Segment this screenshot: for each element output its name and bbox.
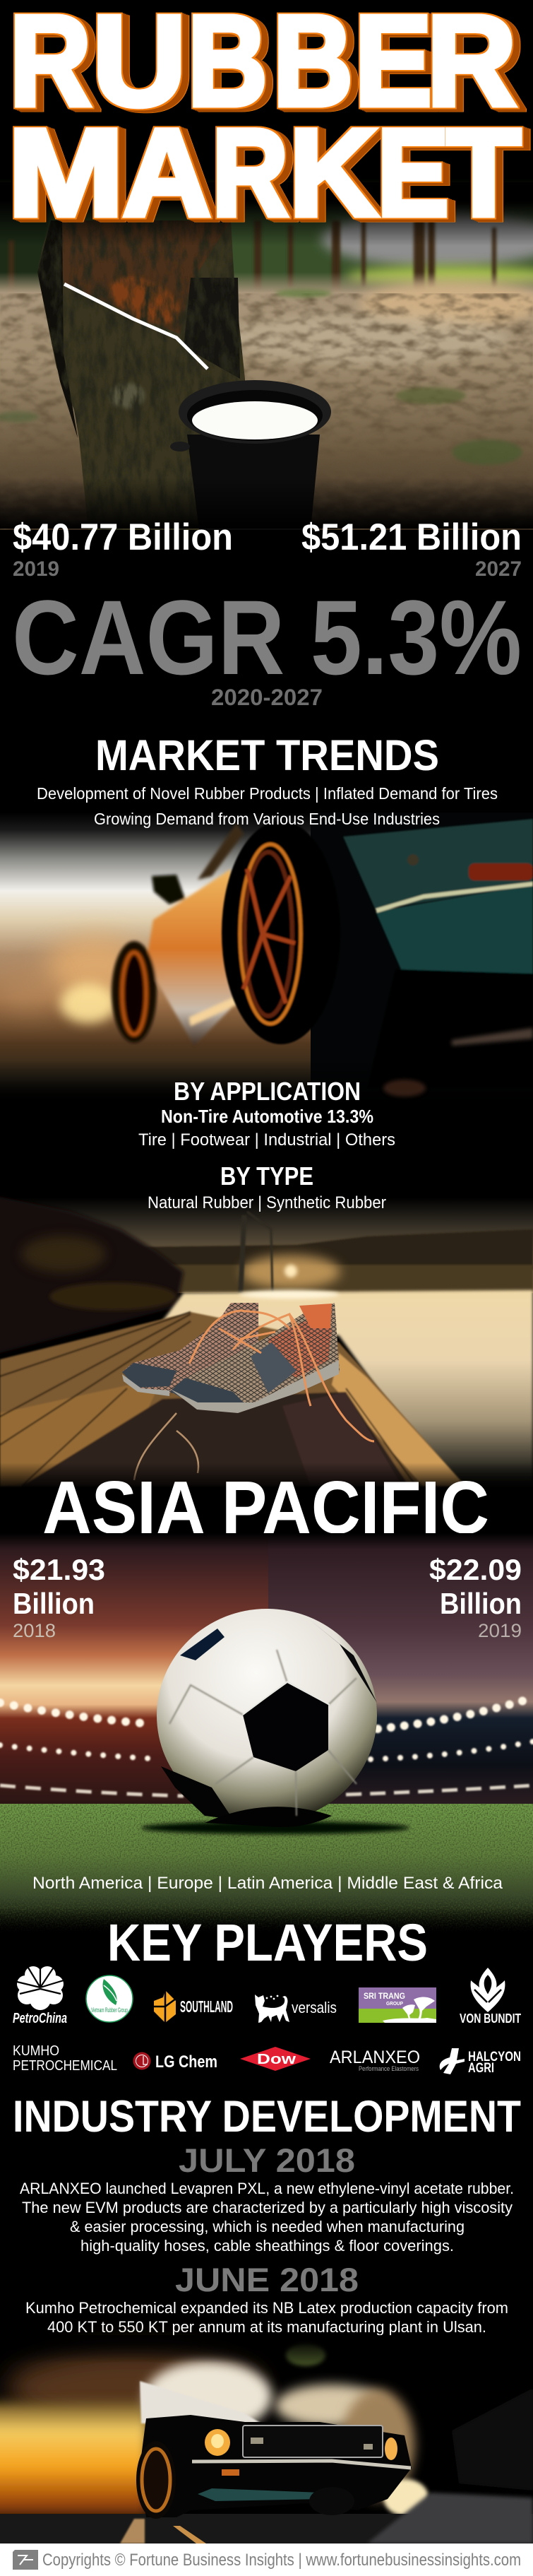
heading: by type: BY TYPE — [220, 1162, 313, 1190]
title: T — [446, 104, 521, 242]
logo: versalis: versalis — [292, 1999, 337, 2016]
year 2027: 2027 — [475, 557, 522, 581]
logo: LG Chem: LG Chem — [155, 2052, 217, 2072]
logo: Dow: Dow — [257, 2052, 297, 2067]
key player logos — [13, 1966, 521, 2076]
footer logo — [13, 2550, 38, 2570]
logo: Halcyon Agri: HALCYON — [468, 2050, 521, 2064]
logo: Halcyon Agri: AGRI — [468, 2061, 494, 2076]
footer — [0, 2543, 533, 2576]
trends line 1: Development of Novel Rubber Products | Inflated Demand for Tires — [37, 784, 498, 803]
logo: Kumho Petrochemical: KUMHO — [13, 2043, 59, 2059]
June 2018 text — [25, 2299, 508, 2336]
market trends — [37, 731, 498, 828]
heading: Asia Pacific: ASIA PACIFIC — [42, 1466, 489, 1549]
date: July 2018: JULY 2018 — [179, 2141, 355, 2179]
logo: Arlanxeo: ARLANXEO — [330, 2048, 420, 2067]
logo: Vietnam Rubber Group: Vietnam Rubber Group — [91, 2007, 128, 2014]
leading share: Non-Tire Automotive 13.3% — [161, 1106, 373, 1127]
date: June 2018: JUNE 2018 — [175, 2261, 359, 2298]
value 2019 unit: Billion — [440, 1587, 522, 1620]
title — [8, 0, 521, 242]
logo: Vietnam Rubber Group — [86, 1975, 133, 2022]
market size stats — [12, 516, 522, 710]
shoes — [122, 1303, 374, 1480]
tire smoke — [0, 2344, 533, 2519]
soccer ball — [157, 1609, 377, 1827]
logo: Sri Trang Group — [359, 1987, 436, 2023]
logo: Kumho Petrochemical: PETROCHEMICAL — [13, 2058, 117, 2074]
tree trunk — [37, 220, 245, 530]
by application and type — [138, 1077, 395, 1212]
title: E — [377, 104, 449, 242]
Asia Pacific values — [13, 1553, 522, 1893]
value 2018: $21.93 — [13, 1553, 105, 1586]
logo: Von Bundit — [460, 1968, 521, 2026]
heading: MARKET TRENDS — [95, 731, 439, 779]
car — [136, 2381, 412, 2519]
front of car — [112, 823, 244, 1046]
value 2018 unit: Billion — [13, 1587, 95, 1620]
logo: PetroChina — [13, 1966, 67, 2026]
main wheel — [222, 821, 340, 1044]
latex cup — [170, 380, 331, 530]
photo: soccer ball in stadium — [0, 1533, 533, 1932]
logo: Dow — [240, 2047, 311, 2071]
industry development — [13, 2092, 521, 2336]
CAGR period: 2020-2027 — [211, 685, 323, 710]
title: R — [212, 104, 289, 242]
value 2019: $22.09 — [429, 1553, 522, 1586]
photo: rubber tree tapping — [0, 182, 533, 530]
stadium lights — [0, 1698, 533, 1796]
heading: by application: BY APPLICATION — [174, 1077, 361, 1106]
region list: North America | Europe | Latin America | Middle East & Africa — [32, 1874, 503, 1893]
heading: key players: KEY PLAYERS — [107, 1913, 428, 1972]
title: K — [289, 104, 378, 242]
photo: muscle car burnout — [0, 2335, 533, 2543]
July 2018 text: & easier processing, which is needed when manufacturing — [70, 2218, 465, 2235]
value 2019: $40.77 Billion — [13, 516, 233, 558]
July 2018 text: The new EVM products are characterized by a particularly high viscosity — [22, 2199, 513, 2216]
logo: Southland — [154, 1990, 233, 2023]
July 2018 text — [20, 2180, 514, 2255]
grass — [0, 1804, 533, 1931]
logo: versalis — [255, 1995, 337, 2023]
June 2018 text: 400 KT to 550 KT per annum at its manufacturing plant in Ulsan. — [47, 2318, 486, 2336]
June 2018 text: Kumho Petrochemical expanded its NB Latex production capacity from — [25, 2299, 508, 2317]
year 2018: 2018 — [13, 1620, 56, 1641]
logo: Sri Trang Group: GROUP — [386, 2000, 403, 2007]
logo: PetroChina: PetroChina — [13, 2011, 67, 2026]
July 2018 text: high-quality hoses, cable sheathings & floor coverings. — [80, 2237, 454, 2255]
dock planks — [0, 1312, 466, 1487]
trends line 2: Growing Demand from Various End-Use Industries — [94, 810, 440, 828]
title: M — [8, 104, 124, 242]
logo: Southland: SOUTHLAND — [180, 1997, 233, 2016]
logo: Sri Trang Group: SRI TRANG — [364, 1991, 405, 2001]
year 2019: 2019 — [478, 1620, 522, 1641]
photo: running shoes on dock — [0, 1194, 533, 1491]
road — [0, 2493, 533, 2543]
title: A — [123, 104, 211, 242]
logo: LG Chem — [133, 2052, 217, 2072]
logo: Halcyon Agri — [440, 2048, 521, 2076]
year 2019: 2019 — [13, 557, 59, 581]
teal bodywork — [343, 819, 533, 1088]
application list: Tire | Footwear | Industrial | Others — [138, 1130, 395, 1150]
type list: Natural Rubber | Synthetic Rubber — [148, 1193, 386, 1212]
logo: Kumho Petrochemical — [13, 2043, 117, 2074]
logo: Arlanxeo: Performance Elastomers — [359, 2065, 419, 2073]
photo: racing car wheel — [0, 813, 533, 1104]
latex cut — [64, 284, 208, 369]
July 2018 text: ARLANXEO launched Levapren PXL, a new ethylene-vinyl acetate rubber. — [20, 2180, 514, 2197]
